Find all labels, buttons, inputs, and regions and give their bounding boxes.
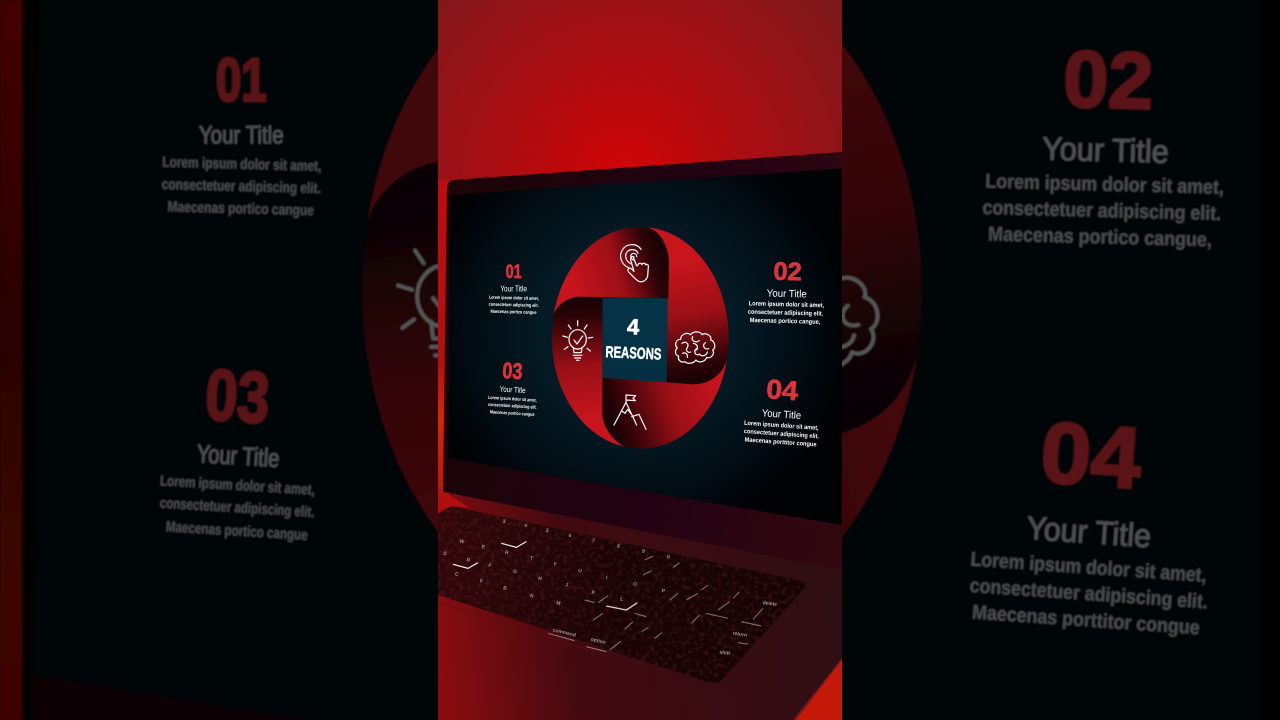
keyboard key labels: U xyxy=(577,568,583,575)
keyboard key labels: 8 xyxy=(616,543,621,550)
keyboard key labels: J xyxy=(564,582,569,589)
keyboard key labels: 3 xyxy=(502,519,506,525)
keyboard key labels: command xyxy=(552,627,576,639)
keyboard mottled red texture xyxy=(438,500,810,690)
item 01, left view: consectetuer adipiscing elit. xyxy=(162,177,321,197)
item 04: 04 xyxy=(765,373,800,406)
keyboard key labels: 0 xyxy=(666,554,671,561)
keyboard key labels: I xyxy=(605,575,609,581)
item 01: Lorem ipsum dolor sit amet, xyxy=(489,295,539,301)
item 02: 02 xyxy=(773,258,802,286)
ribbon circle, right view xyxy=(842,42,922,538)
item 03: Maecenas portico cangue xyxy=(490,409,535,417)
keyboard key labels: N xyxy=(529,593,534,600)
keyboard key labels: O xyxy=(632,581,638,588)
keyboard key labels: C xyxy=(454,571,459,578)
item 04, right view: Your Title xyxy=(1026,509,1152,554)
screen backing, right view xyxy=(842,42,1224,638)
item 02, right view: 02 xyxy=(1062,33,1154,126)
centre label: 4 reasons: 4 xyxy=(627,314,641,340)
item 02, right view: Your Title xyxy=(1042,130,1169,170)
item 01, left view: Maecenas portico cangue xyxy=(167,199,314,219)
centre label: 4 reasons: REASONS xyxy=(605,344,662,364)
item 01 xyxy=(488,262,539,315)
laptop bezel xyxy=(443,152,842,570)
panel: centre laptop photo xyxy=(438,0,842,720)
keyboard xyxy=(438,500,810,690)
trackpad edge xyxy=(438,602,595,652)
laptop deck xyxy=(438,492,842,720)
keyboard key labels: 4 xyxy=(523,523,528,529)
ribbon circle diagram xyxy=(552,227,729,449)
item 04, right view: Lorem ipsum dolor sit amet, xyxy=(970,549,1207,587)
black right edge, right view xyxy=(1262,0,1280,720)
item 01: 01 xyxy=(506,262,522,283)
keyboard key labels: Y xyxy=(553,561,558,568)
item 02 xyxy=(748,262,824,325)
item 04: consectetuer adipiscing elit. xyxy=(744,428,819,440)
red left edge behind laptop xyxy=(438,180,450,510)
item 02: consectetuer adipiscing elit. xyxy=(748,309,824,318)
item 03 xyxy=(488,362,536,417)
item 01, left view: Lorem ipsum dolor sit amet, xyxy=(162,155,322,175)
keyboard key labels: option xyxy=(590,637,606,646)
item 02, right view: consectetuer adipiscing elit. xyxy=(982,197,1221,225)
screen xyxy=(448,168,842,525)
keyboard key labels xyxy=(443,519,778,657)
keyboard key labels: M xyxy=(555,600,561,607)
keyboard key labels: return xyxy=(732,631,747,639)
item 03: Lorem ipsum dolor sit amet, xyxy=(488,395,537,403)
item 04: Lorem ipsum dolor sit amet, xyxy=(744,420,819,432)
item 03, left view: consectetuer adipiscing elit. xyxy=(159,496,315,521)
item 01: consectetuer adipiscing elit. xyxy=(489,302,539,308)
keyboard key labels: K xyxy=(591,590,596,596)
centre label: 4 reasons xyxy=(606,318,662,360)
item 03, left view: Maecenas portico cangue xyxy=(165,519,308,544)
panel: left zoomed laptop view xyxy=(0,0,438,720)
item 01, left view: Your Title xyxy=(199,121,284,149)
item 01, left view: 01 xyxy=(216,46,267,115)
item 02: Your Title xyxy=(767,288,807,301)
item 04, right view: Maecenas porttitor congue xyxy=(971,602,1200,639)
keyboard key labels: delete xyxy=(762,600,778,608)
item 02: Lorem ipsum dolor sit amet, xyxy=(749,300,824,309)
screen, left view xyxy=(158,124,320,542)
ribbon circle, left view xyxy=(362,48,438,533)
red wedge beside keyboard xyxy=(438,488,470,512)
red backdrop glow xyxy=(438,0,842,720)
item 04, right view: consectetuer adipiscing elit. xyxy=(969,575,1208,614)
keyboard key labels: S xyxy=(443,551,448,557)
item 03, left view: Your Title xyxy=(196,440,280,473)
keyboard key labels: D xyxy=(466,557,471,564)
item 02, right view: Lorem ipsum dolor sit amet, xyxy=(985,171,1224,199)
keyboard key labels: 9 xyxy=(641,548,646,555)
red strip at far left xyxy=(0,0,22,720)
item 01: Maecenas portico cangue xyxy=(490,309,537,315)
keyboard key labels: V xyxy=(479,578,484,585)
item 04: Your Title xyxy=(761,408,802,422)
item 03, left view: 03 xyxy=(203,355,272,439)
keyboard key labels: 6 xyxy=(568,533,572,539)
keyboard key labels: R xyxy=(504,550,509,556)
keyboard key labels: E xyxy=(481,544,486,551)
item 03: 03 xyxy=(502,357,523,384)
keyboard key labels: T xyxy=(529,555,534,562)
item 02, right view: Maecenas portico cangue, xyxy=(988,224,1212,251)
dimming overlay, left view xyxy=(0,0,438,720)
item 03: Your Title xyxy=(499,385,526,395)
item 03, left view xyxy=(159,367,315,544)
item 04: Maecenas porttitor congue xyxy=(744,436,817,449)
item 02, right view xyxy=(982,31,1228,252)
keyboard key labels: G xyxy=(512,569,518,575)
panel: right zoomed laptop view xyxy=(842,42,1224,638)
item 03: consectetuer adipiscing elit. xyxy=(488,402,537,410)
keyboard key labels: L xyxy=(619,596,624,603)
black backing, left view xyxy=(22,0,24,720)
keyboard key labels: shift xyxy=(719,650,731,657)
keyboard key labels: 7 xyxy=(591,538,596,544)
keyboard key labels: 5 xyxy=(545,528,550,534)
dimming overlay, right view xyxy=(842,0,1280,720)
glowing table corner xyxy=(796,660,842,720)
keyboard highlight strokes xyxy=(453,542,763,652)
item 04, right view xyxy=(969,420,1208,638)
lower bezel, left view xyxy=(34,674,307,720)
item 01, left view xyxy=(161,46,322,219)
item 04, right view: 04 xyxy=(1038,405,1144,507)
keyboard key labels: P xyxy=(661,588,666,595)
keyboard key labels: W xyxy=(459,539,465,546)
item 01: Your Title xyxy=(500,284,527,293)
item 04 xyxy=(744,379,819,448)
keyboard key labels: F xyxy=(488,563,492,569)
keyboard key labels: B xyxy=(502,585,508,592)
item 03, left view: Lorem ipsum dolor sit amet, xyxy=(160,473,315,499)
item 02: Maecenas portico cangue, xyxy=(750,317,821,326)
keyboard key labels: H xyxy=(537,576,543,582)
